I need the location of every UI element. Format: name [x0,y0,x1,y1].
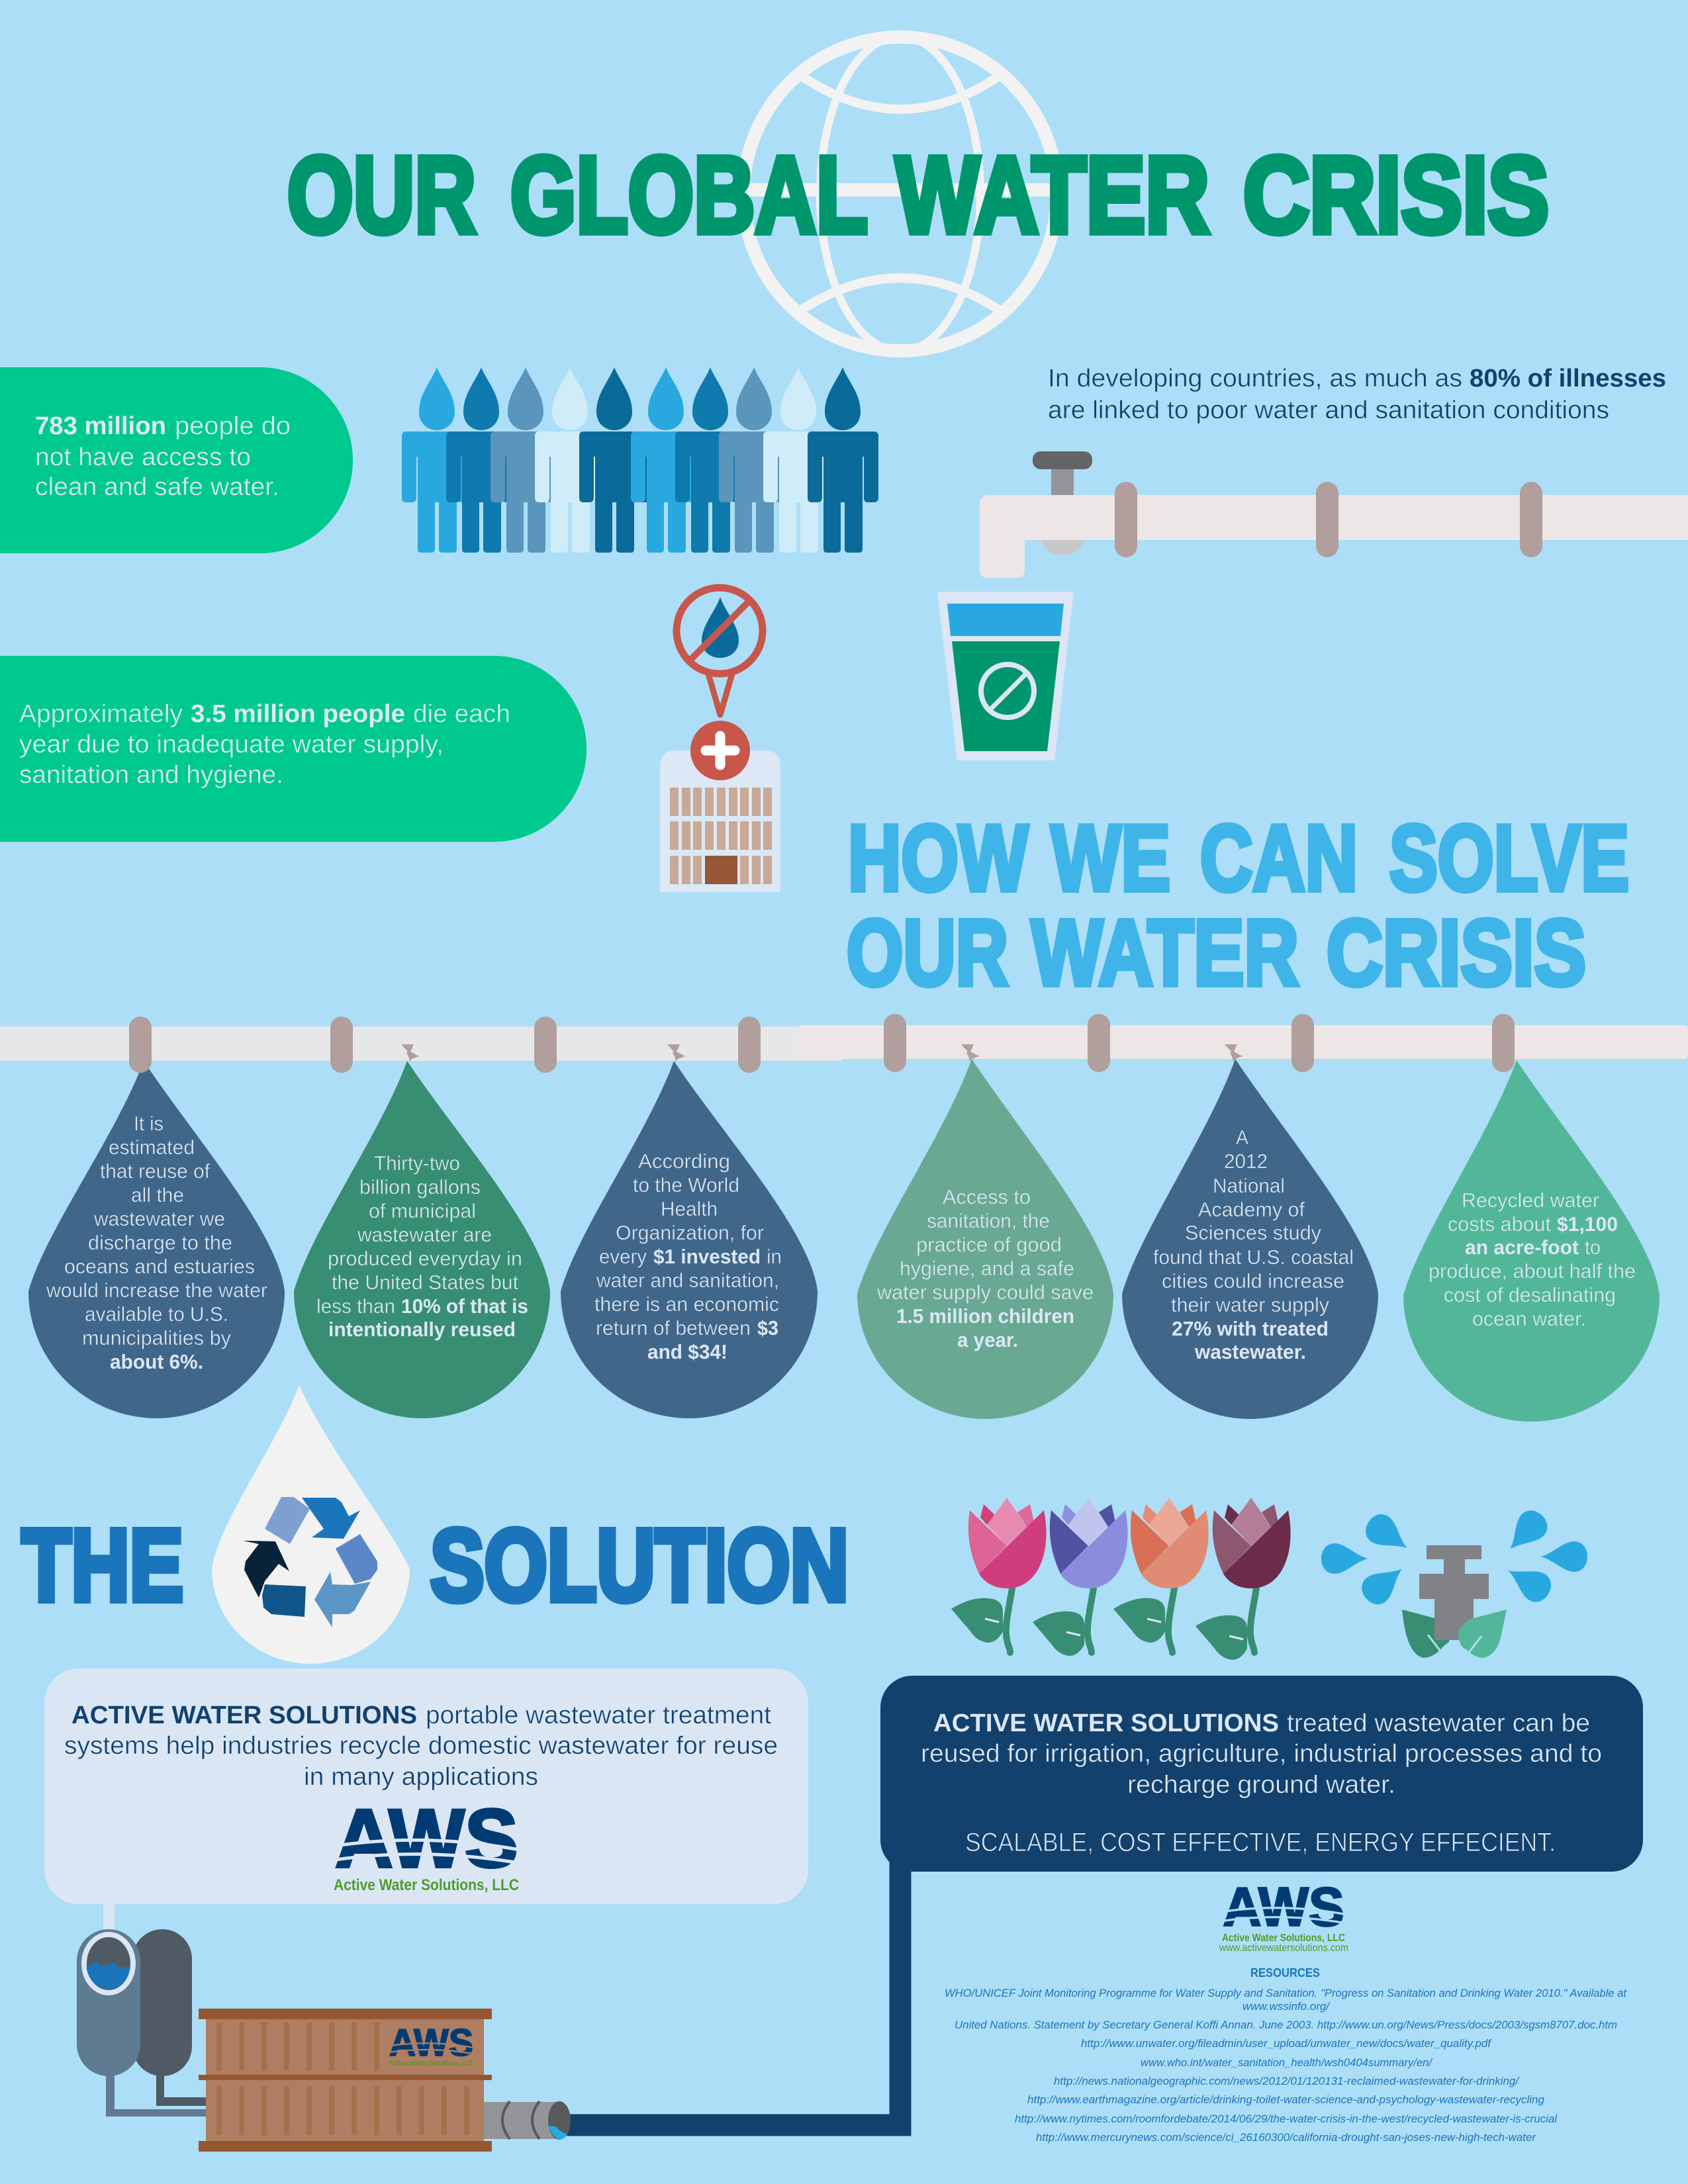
drop: 6 percent reuse: would increase the water [46,1279,267,1302]
drop: 1.5 million children: a year. [957,1328,1018,1351]
icon: row of water-drop people [402,367,878,553]
icon: hospital building [660,721,780,892]
heading: the solution: SOLUTION [430,1508,849,1622]
drop: thirty-two billion gallons: produced everyday in [328,1247,522,1270]
connector: pipe from panel to tanks [103,1904,115,1937]
panel: 783 million callout: 783 million [35,412,166,440]
drop: recycled water cost: ocean water. [1472,1307,1586,1330]
drop: national academy of sciences study: found that U.S. coastal [1153,1246,1354,1269]
drop: recycled water cost: costs about [1448,1212,1551,1236]
drop: recycled water cost: Recycled water [1462,1189,1599,1212]
drop: world health organization return: every [599,1245,647,1268]
heading: the solution: THE [22,1508,183,1622]
icon: tulip 4 [1196,1498,1291,1660]
heading: how we can solve our water crisis: HOW [848,805,1028,910]
text: resources list: http://www.mercurynews.com/science/ci_26160300/california-drought-san-joses-new-high-tech-water [1036,2131,1536,2144]
logo: AWS footer: Active Water Solutions, LLC [1222,1933,1345,1944]
drop: 6 percent reuse: oceans and estuaries [64,1255,255,1278]
drop: 1.5 million children: sanitation, the [927,1209,1050,1232]
panel: treated wastewater reuse [880,1676,1643,1872]
drop: world health organization return: According [638,1150,730,1173]
text: resources list [945,1966,1627,2144]
drop: thirty-two billion gallons: Thirty-two [374,1152,460,1175]
drop: 6 percent reuse: all the [131,1183,184,1206]
drop: recycled water cost: $1,100 [1557,1212,1618,1236]
panel: 3.5 million callout: 3.5 million people [191,700,405,728]
icon: tulip 3 [1113,1498,1209,1653]
logo: AWS: AWS [335,1793,518,1885]
drop: national academy of sciences study: 2012 [1224,1150,1268,1173]
drop: 6 percent reuse: discharge to the [88,1231,232,1254]
drop: thirty-two billion gallons: less than [316,1295,395,1318]
heading: how we can solve our water crisis [847,805,1629,1005]
logo: AWS on container: Active Water Solutions, LLC [389,2060,474,2068]
panel: portable systems: systems help industries recycle domestic wastewater for reuse [64,1732,778,1760]
panel: 783 million callout [0,367,353,553]
panel: portable systems [44,1668,808,1904]
text: resources list: http://news.nationalgeographic.com/news/2012/01/120131-reclaimed-wastewater-for-drinking/ [1054,2075,1520,2087]
drop: thirty-two billion gallons: billion gallons [359,1175,481,1199]
drop: thirty-two billion gallons: of municipal [369,1199,476,1222]
drop: 1.5 million children: 1.5 million children [896,1304,1074,1328]
drop: 6 percent reuse: estimated [109,1136,195,1159]
panel: portable systems: in many applications [304,1763,538,1791]
pipe: treated water line to right panel [565,1853,900,2125]
drop: national academy of sciences study: A [1236,1126,1248,1149]
drop: thirty-two billion gallons: the United States but [332,1271,518,1294]
text: resources list: http://www.earthmagazine.org/article/drinking-toilet-water-science-and-psychology-wastewater-recycling [1027,2093,1545,2106]
panel: 3.5 million callout: sanitation and hygiene. [19,761,283,789]
icon: globe [741,36,1059,351]
drop: recycled water cost: an acre-foot [1465,1236,1579,1259]
drop: recycled water cost: produce, about half the [1429,1259,1636,1283]
drop: world health organization return: $3 [757,1316,778,1340]
title [287,134,1549,255]
pipe: right horizontal pipe [798,1025,1688,1059]
drop: 1.5 million children: Access to [943,1185,1031,1208]
panel: 783 million callout: people do [175,412,291,440]
logo: AWS on container: AWS [389,2022,473,2064]
logo: AWS footer: www.activewatersolutions.com [1219,1942,1348,1954]
drop: 6 percent reuse: wastewater we [93,1207,225,1230]
panel: 3.5 million callout [0,656,586,842]
drop: national academy of sciences study: 27% with treated [1172,1317,1329,1340]
drop: 6 percent reuse [28,1061,285,1418]
icon: glass of unsafe water [937,592,1074,760]
panel: 783 million callout: clean and safe water. [35,473,279,501]
icon: outlet pipe [484,2101,571,2140]
drop: 1.5 million children: practice of good [916,1233,1062,1256]
panel: 3.5 million callout: die each [413,700,510,728]
text: 80% of illnesses: In developing countries, as much as [1048,365,1462,392]
drop: recycled water cost [1403,1060,1660,1422]
drop: national academy of sciences study: Academy of [1198,1198,1305,1221]
text: 80% of illnesses: 80% of illnesses [1470,365,1666,392]
icon: treatment container [199,2009,492,2152]
title: WATER [896,134,1209,255]
title: OUR [287,134,476,255]
drop: thirty-two billion gallons: wastewater are [357,1223,492,1246]
drop: national academy of sciences study: National [1213,1174,1285,1197]
panel: 783 million callout: not have access to [35,443,251,471]
drop: world health organization return: Organization, for [616,1221,764,1244]
panel: treated wastewater reuse: reused for irrigation, agriculture, industrial processes and to [921,1740,1602,1768]
drop: 1.5 million children: water supply could save [876,1281,1094,1304]
pipe clamps: left pipe [129,1017,761,1073]
drop: world health organization return: there is an economic [594,1293,779,1316]
drop: world health organization return: Health [661,1197,718,1220]
text: resources list: United Nations. Statement by Secretary General Koffi Annan. June 2003. http://www.un.org/News/Press/docs/2003/sgsm8707.doc.htm [955,2019,1617,2031]
panel: 3.5 million callout: year due to inadequate water supply, [19,731,444,758]
drop: thirty-two billion gallons [294,1044,550,1418]
drop: national academy of sciences study: Sciences study [1185,1221,1321,1244]
drop: 1.5 million children: hygiene, and a safe [900,1257,1074,1280]
drop: 6 percent reuse: available to U.S. [85,1302,228,1326]
drop: national academy of sciences study: their water supply [1171,1293,1329,1316]
heading: the solution [22,1508,849,1622]
drop: national academy of sciences study: cities could increase [1162,1269,1344,1293]
text: resources list: www.who.int/water_sanitation_health/wsh0404summary/en/ [1141,2056,1433,2069]
panel: treated wastewater reuse: recharge ground water. [1127,1771,1395,1799]
text: 80% of illnesses: are linked to poor water and sanitation conditions [1048,396,1609,424]
pipe clamps: right pipe [884,1014,1515,1072]
panel: portable systems: ACTIVE WATER SOLUTIONS [71,1702,417,1729]
drop: national academy of sciences study [1122,1044,1378,1419]
icon: tulip 2 [1033,1498,1128,1656]
heading: how we can solve our water crisis: OUR [847,900,1008,1005]
drop: national academy of sciences study: wastewater. [1194,1340,1306,1363]
icon: water tanks [77,1929,206,2116]
pipe: left horizontal pipe [0,1026,842,1061]
drop: world health organization return: and $34! [647,1340,727,1363]
drop: 1.5 million children [857,1044,1113,1419]
drop: 6 percent reuse: about 6%. [110,1350,203,1373]
title: CRISIS [1243,134,1549,255]
heading: how we can solve our water crisis: CRISIS [1327,900,1586,1005]
drop: recycled water cost: to [1585,1236,1601,1259]
drop: thirty-two billion gallons: intentionally reused [328,1318,516,1341]
title: GLOBAL [510,134,868,255]
drop: 6 percent reuse: municipalities by [82,1326,231,1349]
drop: world health organization return: return of between [596,1316,751,1340]
panel: treated wastewater reuse: SCALABLE, COST EFFECTIVE, ENERGY EFFECIENT. [965,1828,1556,1857]
drop: world health organization return: $1 invested [653,1245,761,1268]
drop: world health organization return [561,1044,818,1418]
heading: how we can solve our water crisis: WE [1051,805,1170,910]
panel: treated wastewater reuse: treated wastewater can be [1287,1709,1590,1737]
icon: faucet pipe [980,451,1688,578]
drop: world health organization return: to the World [633,1173,739,1197]
icon: recycle drop [212,1385,410,1664]
panel: portable systems: portable wastewater treatment [426,1702,771,1729]
drop: 6 percent reuse: that reuse of [100,1160,210,1183]
icon: sprinkler with leaves [1321,1505,1587,1658]
logo: AWS: Active Water Solutions, LLC [334,1876,519,1894]
panel: 3.5 million callout: Approximately [19,700,183,728]
heading: how we can solve our water crisis: CAN [1200,805,1358,910]
drop: thirty-two billion gallons: 10% of that is [401,1295,528,1318]
icon: tulip 1 [951,1498,1047,1653]
drop: 6 percent reuse: It is [134,1112,164,1135]
text: resources list: www.wssinfo.org/ [1243,2000,1331,2013]
icon: no water map pin [677,588,763,715]
text: resources list: RESOURCES [1250,1966,1320,1979]
logo: AWS footer: AWS [1223,1876,1344,1938]
drop: world health organization return: water and sanitation, [596,1269,779,1292]
heading: how we can solve our water crisis: WATER [1031,900,1299,1005]
text: resources list: WHO/UNICEF Joint Monitoring Programme for Water Supply and Sanitation. "Progress on Sanitation and Drinking Water 2010." Available at [945,1987,1627,1999]
panel: treated wastewater reuse: ACTIVE WATER SOLUTIONS [933,1709,1279,1737]
text: resources list: http://www.unwater.org/fileadmin/user_upload/unwater_new/docs/water_quality.pdf [1081,2037,1492,2050]
drop: recycled water cost: cost of desalinating [1444,1283,1616,1306]
text: 80% of illnesses [1048,365,1666,424]
drop: world health organization return: in [767,1245,782,1268]
text: resources list: http://www.nytimes.com/roomfordebate/2014/06/29/the-water-crisis-in-the-west/recycled-wastewater-is-crucial [1015,2113,1558,2125]
